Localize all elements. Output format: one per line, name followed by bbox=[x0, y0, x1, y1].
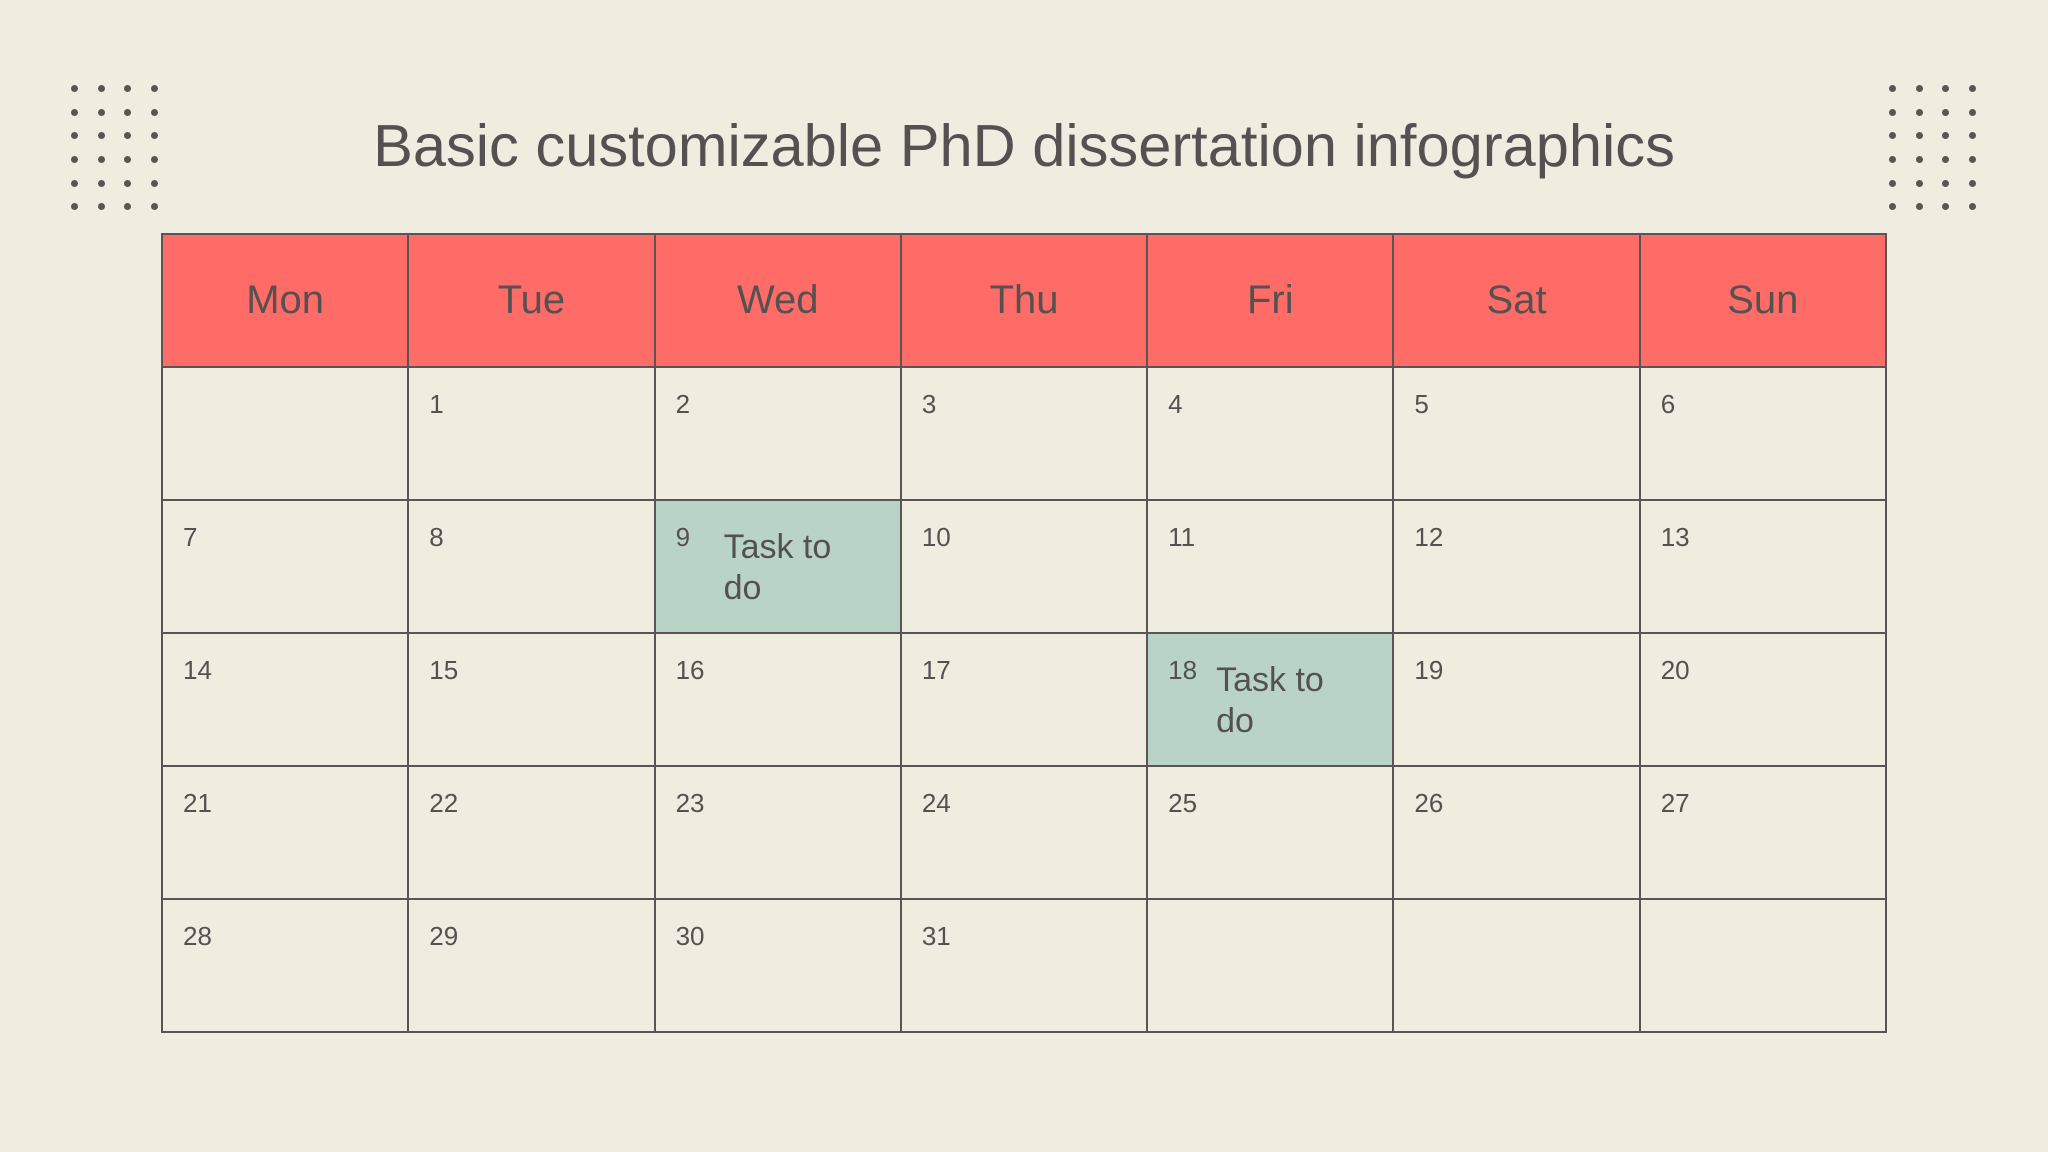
decorative dots right bbox=[1889, 85, 1976, 210]
calendar table bbox=[161, 233, 1887, 1033]
calendar table: 13 bbox=[1661, 522, 1690, 552]
calendar table: 10 bbox=[922, 522, 951, 552]
calendar table: 14 bbox=[183, 655, 212, 685]
decorative dots left bbox=[71, 85, 158, 210]
calendar table: 15 bbox=[429, 655, 458, 685]
calendar table: 29 bbox=[429, 921, 458, 951]
calendar table: 7 bbox=[183, 522, 197, 552]
calendar table: Fri bbox=[1247, 278, 1294, 322]
calendar table: 16 bbox=[676, 655, 704, 685]
calendar table: 21 bbox=[183, 788, 212, 818]
calendar table: Task to bbox=[1216, 661, 1324, 699]
calendar table: 27 bbox=[1661, 788, 1690, 818]
calendar table: Tue bbox=[498, 278, 565, 322]
calendar table: 3 bbox=[922, 389, 936, 419]
calendar table: 2 bbox=[676, 389, 690, 419]
calendar table: Sat bbox=[1487, 278, 1547, 322]
calendar table: 6 bbox=[1661, 389, 1675, 419]
calendar table: 30 bbox=[676, 921, 704, 951]
calendar table: Sun bbox=[1727, 278, 1798, 322]
calendar table: 20 bbox=[1661, 655, 1690, 685]
calendar table: Mon bbox=[246, 278, 324, 322]
calendar table: 17 bbox=[922, 655, 951, 685]
calendar table: 22 bbox=[429, 788, 458, 818]
calendar table: Thu bbox=[990, 278, 1058, 322]
calendar table: 11 bbox=[1168, 522, 1195, 552]
calendar table: 4 bbox=[1168, 389, 1183, 419]
title: Basic customizable PhD dissertation infographics bbox=[373, 112, 1675, 179]
calendar table: Wed bbox=[737, 278, 818, 322]
calendar table: 5 bbox=[1414, 389, 1429, 419]
calendar table: 12 bbox=[1414, 522, 1443, 552]
calendar table: Task to bbox=[724, 528, 831, 566]
calendar table: 19 bbox=[1414, 655, 1443, 685]
calendar table: do bbox=[1216, 702, 1254, 740]
calendar table: 28 bbox=[183, 921, 212, 951]
calendar table: 8 bbox=[429, 522, 444, 552]
calendar table: 31 bbox=[922, 921, 951, 951]
calendar table: 18 bbox=[1168, 655, 1197, 685]
calendar table: 25 bbox=[1168, 788, 1197, 818]
calendar table: 1 bbox=[429, 389, 444, 419]
calendar table: 24 bbox=[922, 788, 951, 818]
calendar table: do bbox=[724, 569, 761, 607]
calendar table: 26 bbox=[1414, 788, 1443, 818]
calendar table: 9 bbox=[676, 522, 690, 552]
calendar table: 23 bbox=[676, 788, 704, 818]
